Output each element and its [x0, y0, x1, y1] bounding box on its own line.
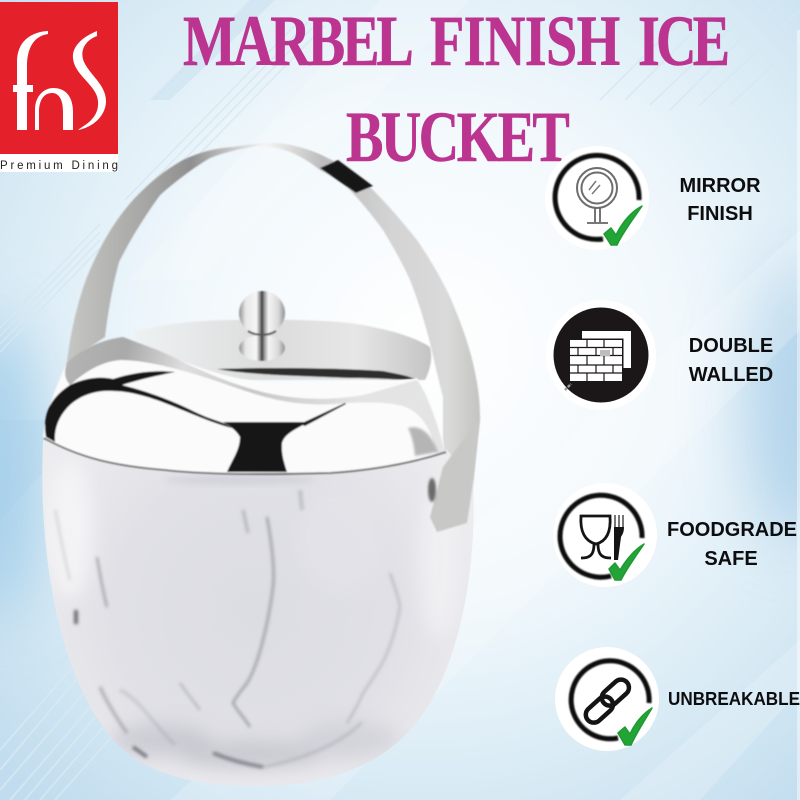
chrome lid rim [43, 337, 446, 474]
lid black reflection [45, 371, 346, 472]
label: DOUBLE [689, 335, 773, 357]
label [689, 335, 773, 386]
handle mount [428, 417, 480, 532]
feature: foodgrade safe [553, 483, 797, 587]
feature: double walled [546, 300, 773, 410]
feature: mirror finish [545, 146, 761, 250]
icon: mirror [545, 146, 649, 250]
icon: check [609, 544, 644, 580]
logo tagline: Premium Dining [0, 160, 118, 172]
title [183, 0, 730, 177]
marble mottling [54, 480, 448, 770]
title: ICE [638, 0, 730, 81]
icon: check [604, 206, 642, 245]
title: BUCKET [346, 96, 570, 177]
title: MARBEL [183, 0, 414, 81]
logo: FnS Premium Dining [0, 2, 118, 172]
label [667, 519, 797, 570]
feature: unbreakable [555, 647, 800, 751]
label: FINISH [687, 203, 753, 225]
label: WALLED [689, 364, 773, 386]
marble veins [55, 490, 400, 767]
logo letters [13, 31, 106, 130]
handle [67, 143, 480, 532]
label [679, 175, 761, 225]
lid left highlight strap [65, 337, 445, 453]
lid knob [239, 291, 285, 361]
lid top [133, 291, 431, 380]
label: SAFE [704, 548, 758, 570]
bucket body [30, 430, 490, 790]
icon: chain link [555, 647, 659, 751]
title: FINISH [430, 0, 620, 81]
product: marble ice bucket [30, 143, 490, 790]
icon: glass and fork [553, 483, 657, 587]
icon: check [618, 708, 652, 745]
label: FOODGRADE [667, 519, 797, 541]
label: MIRROR [679, 175, 761, 197]
icon: brick wall [546, 300, 656, 410]
